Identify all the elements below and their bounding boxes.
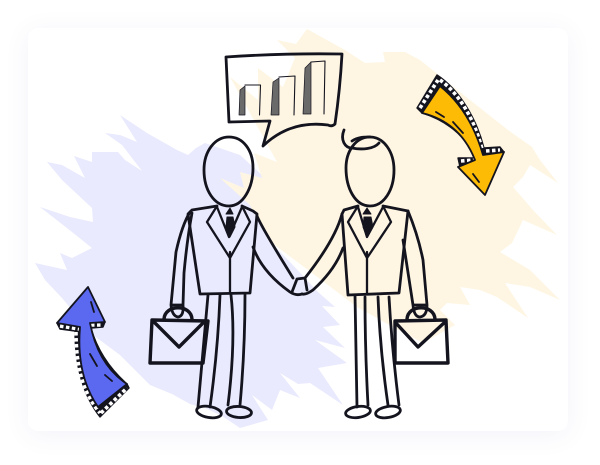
clasped hands (292, 278, 307, 292)
brush stroke: yellow (220, 29, 560, 343)
legs (198, 295, 245, 407)
shaking arm (253, 216, 302, 295)
legs (355, 295, 399, 407)
feet (196, 404, 222, 420)
tie (363, 208, 373, 237)
arrow: blue up (57, 287, 129, 417)
briefcase (395, 308, 448, 363)
arm with briefcase (171, 212, 192, 317)
tie (226, 208, 235, 237)
jacket (188, 206, 257, 294)
hair (343, 130, 379, 149)
head (204, 137, 253, 206)
jacket (342, 206, 408, 295)
brush stroke: blue (35, 115, 347, 428)
person: right businessman (292, 130, 448, 420)
arm with briefcase (403, 211, 427, 317)
bar chart (239, 61, 325, 115)
person: left businessman (150, 137, 302, 420)
head (346, 137, 394, 206)
feet (345, 405, 371, 419)
card background (28, 28, 568, 431)
shaking arm (302, 214, 343, 294)
speech bubble (226, 54, 342, 146)
arrow: yellow down (417, 75, 504, 195)
briefcase (150, 308, 208, 363)
